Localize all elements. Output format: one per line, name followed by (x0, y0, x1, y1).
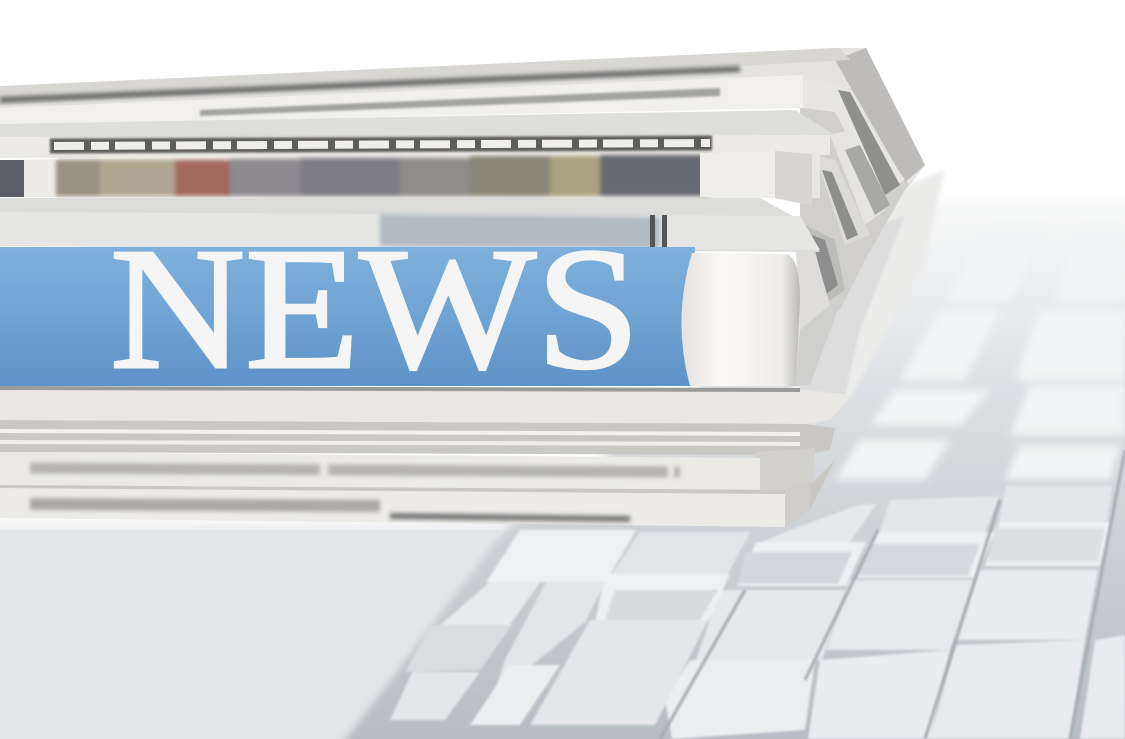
NEWS word: NEWS (110, 212, 640, 405)
side of upper pages (796, 252, 830, 330)
near keys (390, 486, 1125, 739)
keyboard well (330, 205, 1125, 739)
photo band (0, 151, 820, 198)
stack body (0, 48, 925, 335)
page band 2 (0, 75, 803, 125)
fanned side pages (790, 170, 945, 425)
newspaper lower pages (0, 386, 852, 527)
key gaps (660, 450, 1125, 739)
newspaper top pages (0, 48, 925, 386)
far keys, heavily blurred (835, 225, 1125, 480)
page band 3 (0, 110, 835, 140)
masthead text strip (0, 66, 740, 103)
roll end paper (681, 253, 800, 386)
back fold (0, 48, 925, 185)
keyboard keys (330, 205, 1125, 739)
laptop surface (0, 205, 1125, 739)
blue NEWS roll (0, 212, 800, 405)
page band 5 (0, 198, 820, 252)
fold stripes (803, 80, 905, 195)
dark dotted text band (0, 135, 830, 158)
